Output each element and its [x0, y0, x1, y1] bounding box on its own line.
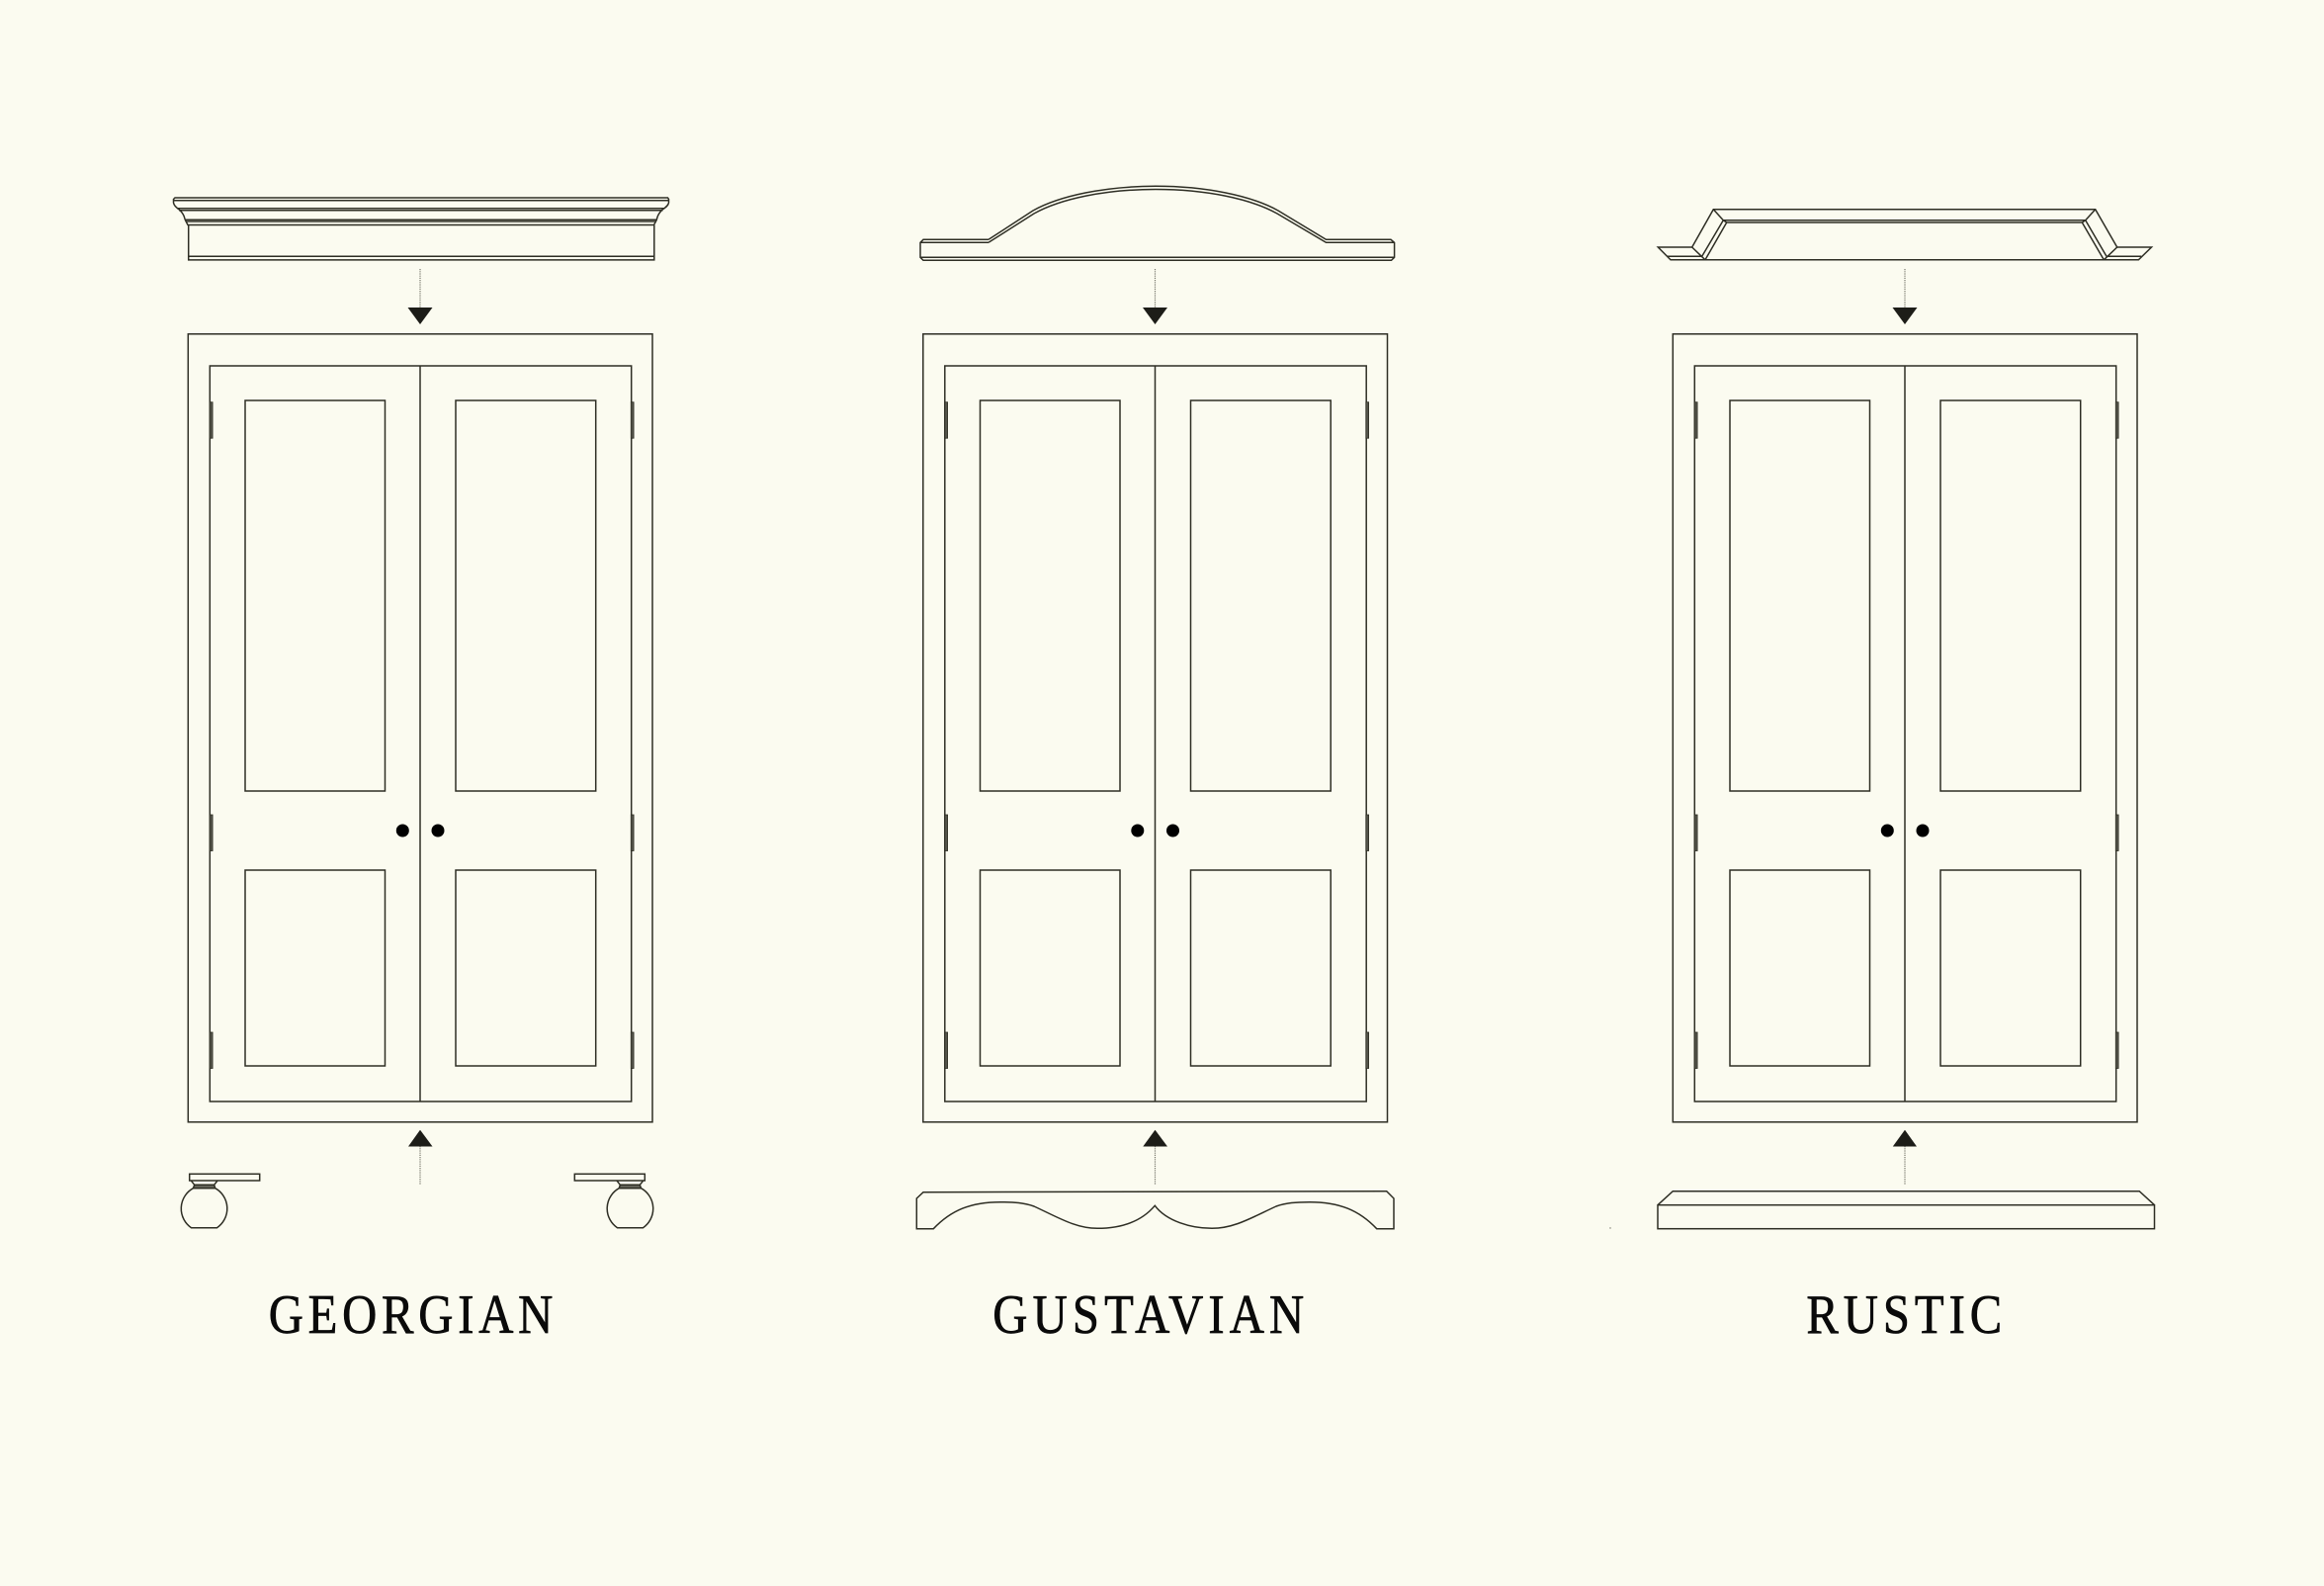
door knobs	[1881, 825, 1930, 837]
panel: Georgian door	[174, 198, 668, 1346]
hinges	[1694, 402, 2118, 1068]
Gustavian scalloped base	[916, 1191, 1394, 1229]
hinges	[210, 402, 634, 1068]
arrow: cornice down to door	[407, 269, 433, 324]
Rustic plank base	[1658, 1191, 2155, 1229]
label: Gustavian: GUSTAVIAN	[992, 1284, 1304, 1346]
Georgian cornice	[174, 198, 668, 260]
door knobs	[396, 825, 445, 837]
arrow: pediment down to door	[1143, 269, 1167, 324]
arrow: pediment down to door	[1892, 269, 1918, 324]
hinges	[945, 402, 1369, 1068]
right bun foot	[574, 1174, 653, 1228]
door knobs	[1131, 825, 1179, 837]
double door	[1673, 334, 2137, 1122]
panel: Gustavian door	[916, 186, 1395, 1346]
Gustavian arched pediment	[920, 186, 1395, 260]
label: Georgian: GEORGIAN	[269, 1284, 553, 1346]
double door	[188, 334, 652, 1122]
left bun foot	[181, 1174, 260, 1228]
label: Rustic: RUSTIC	[1806, 1284, 2002, 1346]
arrow: feet up to door	[408, 1130, 433, 1185]
arrow: base up to door	[1143, 1130, 1167, 1185]
double door	[923, 334, 1388, 1122]
Rustic angled pediment	[1658, 210, 2151, 260]
panel: Rustic door	[1658, 210, 2155, 1346]
arrow: base up to door	[1893, 1130, 1917, 1185]
